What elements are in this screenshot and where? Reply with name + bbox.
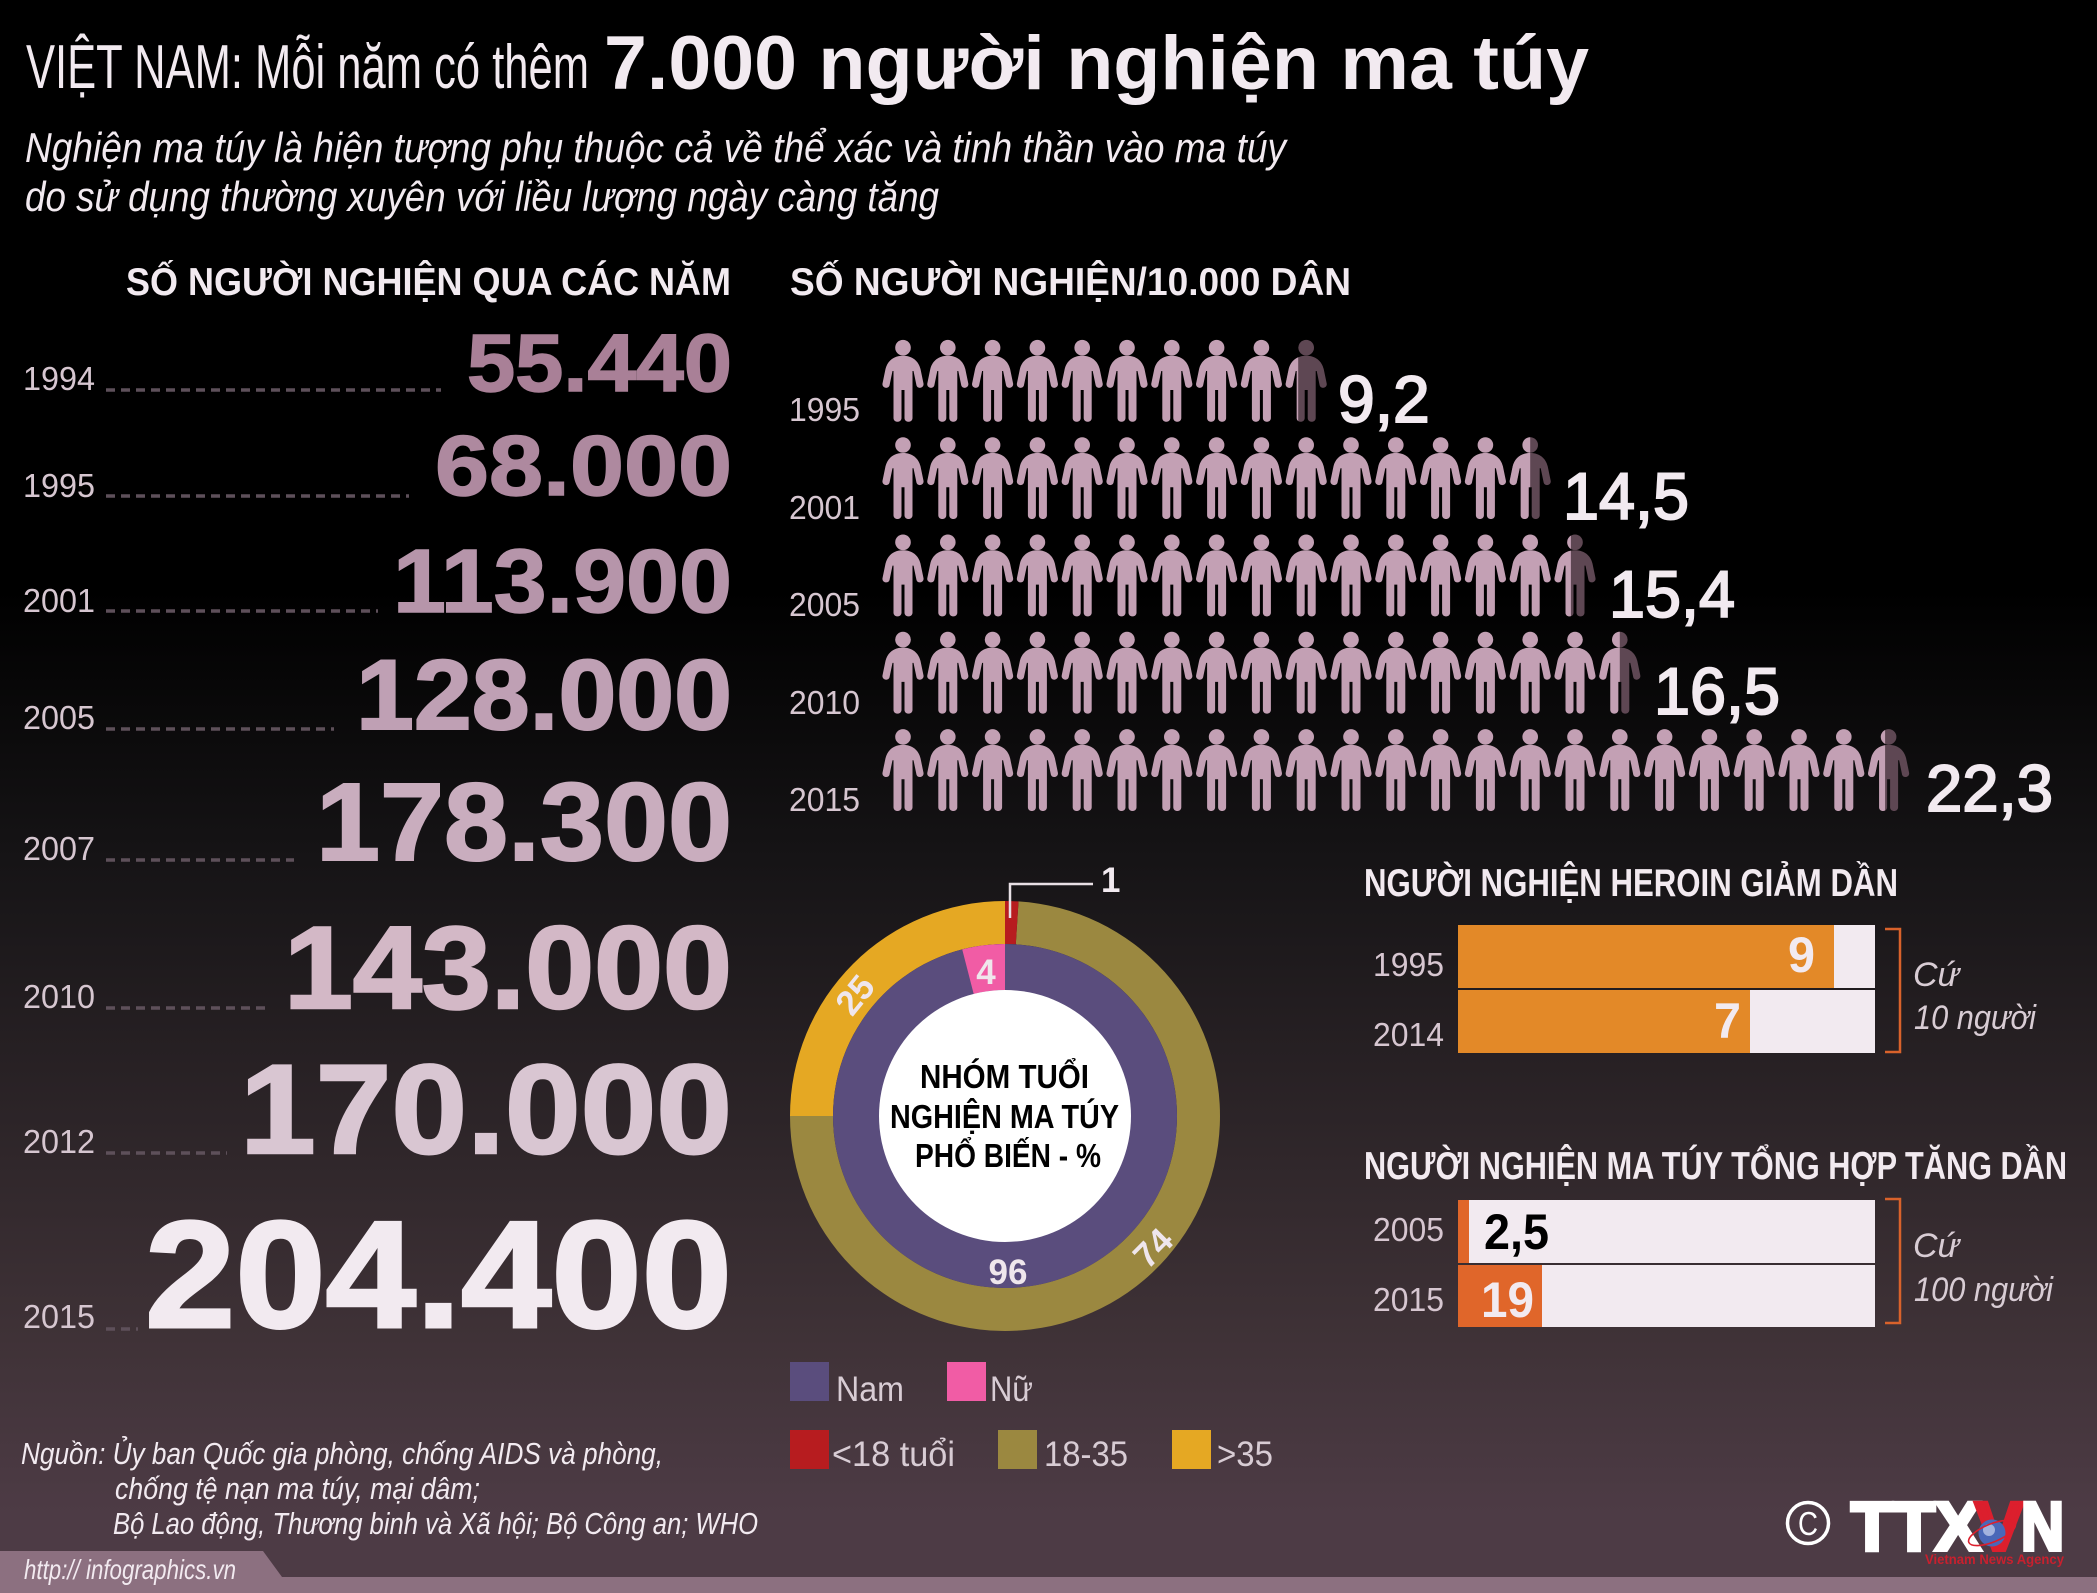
pictogram row 2015: 22,3 — [1926, 751, 2053, 825]
bar 2005: 2005 — [1373, 1211, 1444, 1248]
row 1995: 1995 — [23, 467, 95, 504]
pictogram row 2001 — [789, 437, 1689, 533]
pictogram row 2001: 2001 — [789, 489, 860, 526]
bar 2015: 19 — [1481, 1272, 1534, 1328]
subtitle — [25, 124, 1289, 220]
legend: 18-35: 18-35 — [1044, 1435, 1128, 1474]
inner ring: male — [833, 944, 1177, 1288]
donut value labels: 96 — [989, 1253, 1027, 1292]
title: 7.000 người nghiện ma túy — [604, 21, 1589, 106]
pictogram row 1995 — [789, 340, 1430, 436]
row 1995: 68.000 — [435, 419, 732, 514]
website url: http:// infographics.vn — [24, 1554, 236, 1585]
wordmark — [1851, 1488, 2064, 1565]
pictogram row 2010: 2010 — [789, 684, 860, 721]
donut center title: PHỔ BIẾN - % — [915, 1137, 1101, 1174]
donut center title: NHÓM TUỔI — [920, 1058, 1089, 1095]
pictogram row 2001: 14,5 — [1563, 459, 1689, 533]
globe — [1965, 1515, 2019, 1551]
panel: synthetic drug addicts increasing — [1364, 1143, 2067, 1328]
donut center title — [890, 1058, 1119, 1174]
row 1995 — [23, 419, 732, 514]
donut value labels — [828, 953, 1181, 1292]
bar 2015 — [1373, 1265, 1875, 1328]
bar 2014: 7 — [1714, 993, 1741, 1049]
row 2012: 2012 — [23, 1123, 95, 1160]
row 2001: 113.900 — [393, 532, 732, 632]
logo: TTXVN — [1788, 1488, 2064, 1567]
bracket: per 10 people — [1885, 929, 1900, 1052]
legend: female — [947, 1362, 1033, 1409]
legend — [790, 1362, 1273, 1474]
subtitle: Nghiện ma túy là hiện tượng phụ thuộc cả về thể xác và tinh thần vào ma túy — [25, 124, 1289, 171]
source note: Nguồn: Ủy ban Quốc gia phòng, chống AIDS và phòng, — [21, 1435, 663, 1471]
legend: over 35 — [1172, 1430, 1273, 1474]
row 2007 — [23, 761, 732, 884]
copyright symbol: C — [1798, 1505, 1818, 1542]
row 2005: 128.000 — [356, 639, 732, 750]
pictogram row 2010 — [789, 632, 1780, 728]
title: VIỆT NAM: Mỗi năm có thêm — [26, 33, 589, 102]
legend: under 18: <18 tuổi — [832, 1435, 955, 1474]
bar 1995: 1995 — [1373, 946, 1444, 983]
donut chart: age and gender — [790, 861, 1220, 1331]
source note: Bộ Lao động, Thương binh và Xã hội; Bộ Công an; WHO — [113, 1506, 758, 1541]
outer ring: under 18 — [1005, 901, 1018, 944]
leader line — [1010, 884, 1093, 918]
legend: 18-35 — [998, 1430, 1128, 1474]
row 2015: 2015 — [23, 1298, 95, 1335]
pictogram row 2005 — [789, 534, 1735, 631]
source note — [21, 1435, 758, 1541]
pictogram row 2010: 16,5 — [1654, 654, 1780, 728]
heading: per 10,000: SỐ NGƯỜI NGHIỆN/10.000 DÂN — [790, 259, 1351, 304]
inner ring: female — [962, 944, 1005, 994]
legend: female: Nữ — [990, 1370, 1033, 1409]
bar 2014 — [1373, 990, 1875, 1053]
bar 2005: 2,5 — [1484, 1204, 1549, 1260]
copyright symbol — [1788, 1502, 1828, 1544]
note: per 10 people: Cứ — [1913, 956, 1962, 994]
row 2010 — [23, 902, 732, 1033]
legend: over 35: >35 — [1217, 1435, 1273, 1474]
row 2007: 2007 — [23, 830, 95, 867]
row 2010: 143.000 — [284, 902, 732, 1033]
subtitle: do sử dụng thường xuyên với liều lượng ngày càng tăng — [25, 173, 939, 220]
legend: male: Nam — [836, 1370, 904, 1409]
wordmark: V — [1975, 1488, 2023, 1565]
row 2005: 2005 — [23, 699, 95, 736]
pictogram row 2005: 2005 — [789, 586, 860, 623]
bar 1995: 9 — [1788, 927, 1815, 983]
donut center — [879, 990, 1131, 1242]
pictogram row 1995: 9,2 — [1338, 362, 1430, 436]
legend: under 18 — [790, 1430, 955, 1474]
heading: heroin: NGƯỜI NGHIỆN HEROIN GIẢM DẦN — [1364, 861, 1898, 905]
panel: addicts by year — [23, 259, 732, 1360]
pictogram row 1995: 1995 — [789, 391, 860, 428]
note: per 100 people — [1913, 1227, 2054, 1309]
bar 1995 — [1373, 925, 1875, 988]
title — [26, 21, 1589, 106]
row 2012: 170.000 — [240, 1038, 732, 1180]
outer ring: over 35 — [790, 901, 1005, 1116]
note: per 100 people: 100 người — [1914, 1271, 2054, 1309]
wordmark: N — [2021, 1488, 2064, 1565]
note: per 100 people: Cứ — [1913, 1227, 1962, 1265]
note: per 10 people — [1913, 956, 2037, 1037]
footer band — [0, 1551, 2097, 1593]
row 2005 — [23, 639, 732, 750]
row 2015: 204.400 — [145, 1190, 732, 1360]
wordmark: TTX — [1851, 1488, 1981, 1565]
outer ring: 18-35 — [790, 901, 1220, 1331]
row 1994 — [23, 318, 732, 409]
source note: chống tệ nạn ma túy, mại dâm; — [115, 1471, 480, 1506]
bar 2015: 2015 — [1373, 1281, 1444, 1318]
row 2012 — [23, 1038, 732, 1180]
label: 1: 1 — [1101, 861, 1120, 900]
row 2010: 2010 — [23, 978, 95, 1015]
panel: heroin addicts decreasing — [1364, 861, 2037, 1053]
bracket: per 100 people — [1885, 1199, 1900, 1323]
row 2001: 2001 — [23, 582, 95, 619]
tagline: Vietnam News Agency — [1925, 1551, 2064, 1567]
donut center title: NGHIỆN MA TÚY — [890, 1098, 1119, 1135]
row 1994: 1994 — [23, 360, 95, 397]
pictogram row 2005: 15,4 — [1609, 557, 1735, 631]
pictogram row 2015 — [789, 729, 2053, 825]
note: per 10 people: 10 người — [1914, 999, 2037, 1037]
donut value labels: 4 — [976, 953, 996, 992]
pictogram row 2015: 2015 — [789, 781, 860, 818]
donut value labels: 25 — [828, 968, 883, 1023]
legend: male — [790, 1362, 904, 1409]
row 2001 — [23, 532, 732, 632]
row 1994: 55.440 — [467, 318, 732, 409]
heading: addicts by year: SỐ NGƯỜI NGHIỆN QUA CÁC NĂM — [126, 259, 731, 304]
panel: addicts per 10,000 people — [789, 259, 2053, 825]
row 2007: 178.300 — [316, 761, 732, 884]
donut value labels: 74 — [1126, 1220, 1181, 1276]
bar 2014: 2014 — [1373, 1016, 1444, 1053]
bar 2005 — [1373, 1200, 1875, 1263]
